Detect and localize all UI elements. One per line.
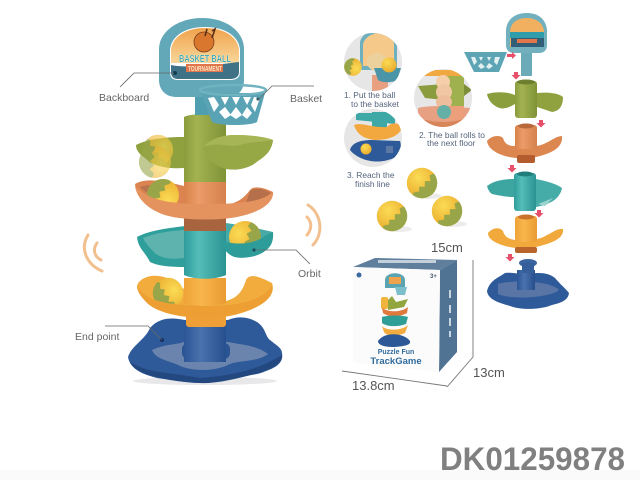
green left tray: [136, 137, 184, 168]
orange tray front rim: [135, 186, 273, 220]
dimension lines: [342, 260, 473, 387]
exploded parts column: [464, 13, 569, 309]
label: Orbit: Orbit: [298, 268, 321, 280]
step 1 caption: to the basket: [351, 99, 400, 109]
yellow column: [184, 278, 226, 306]
part: orange layer: [487, 124, 562, 163]
label: Orbit: [252, 248, 321, 280]
box logo and age mark: 3+: [430, 274, 437, 280]
orange column: [184, 178, 226, 208]
part: green layer: [487, 80, 563, 118]
box art toy: [378, 273, 410, 347]
pole: [195, 95, 209, 115]
green column: [184, 114, 226, 182]
teal right tray back: [226, 223, 273, 245]
product box: [353, 258, 457, 372]
backboard: TOURNAMENT: [188, 66, 222, 73]
box title: TrackGame: [370, 356, 422, 367]
box title: Puzzle Fun: [378, 349, 414, 356]
label: Basket: Basket: [290, 93, 322, 105]
step 3 illustration: [344, 109, 402, 167]
backboard: BASKET BALL: [179, 53, 231, 65]
box side: [439, 260, 457, 372]
step 2 caption: the next floor: [427, 138, 476, 148]
label: Basket: [258, 86, 322, 105]
yellow column lower stub: [186, 312, 226, 327]
label: Backboard: Backboard: [99, 92, 149, 104]
step 2 caption: 2. The ball rolls to: [419, 130, 485, 140]
step 3 caption: 3. Reach the: [347, 170, 395, 180]
box side marks: [449, 290, 451, 337]
part: base: [487, 259, 569, 309]
green right tray: [203, 135, 273, 170]
dimension: 13.8cm: 13.8cm: [352, 378, 395, 393]
assembly arrows: [506, 52, 546, 262]
brown collar: [184, 218, 226, 231]
dimension: 15cm: 15cm: [431, 240, 463, 255]
vibration arcs right: [307, 205, 320, 245]
teal left tray: [137, 226, 185, 267]
basket: [200, 85, 266, 125]
ball on orange tray: [142, 174, 182, 214]
yellow tray: [137, 276, 273, 318]
step 2 illustration: [414, 69, 475, 127]
part: yellow layer: [488, 214, 563, 253]
teal column: [184, 228, 226, 279]
part: small basket: [464, 52, 507, 72]
label: End point: [75, 326, 162, 343]
box top band: [378, 260, 436, 263]
part: small backboard: [506, 13, 547, 76]
vibration arcs left: [84, 235, 102, 271]
yellow tray front rim: [137, 285, 272, 318]
main toy: assembled tower: [128, 18, 282, 385]
translucent balls at upper level: [130, 132, 178, 186]
teal right tray front: [220, 232, 273, 258]
box top: [353, 258, 457, 270]
step 3 caption: finish line: [355, 179, 390, 189]
page background tint: [0, 470, 640, 480]
dimension: 13cm: 13cm: [473, 365, 505, 380]
three loose balls: [377, 168, 467, 233]
label: Backboard: [99, 73, 174, 104]
box front: [353, 267, 440, 372]
label: End point: End point: [75, 331, 119, 343]
step 1 caption: 1. Put the ball: [344, 90, 395, 100]
orange tray: [135, 180, 273, 220]
ball on yellow tray: [148, 275, 186, 312]
part: teal layer: [487, 172, 562, 211]
step 1 illustration: [344, 33, 402, 91]
backboard: [159, 18, 244, 97]
ball on teal tray: [223, 214, 270, 261]
base: [128, 317, 282, 385]
product code: DK01259878: [440, 441, 625, 477]
